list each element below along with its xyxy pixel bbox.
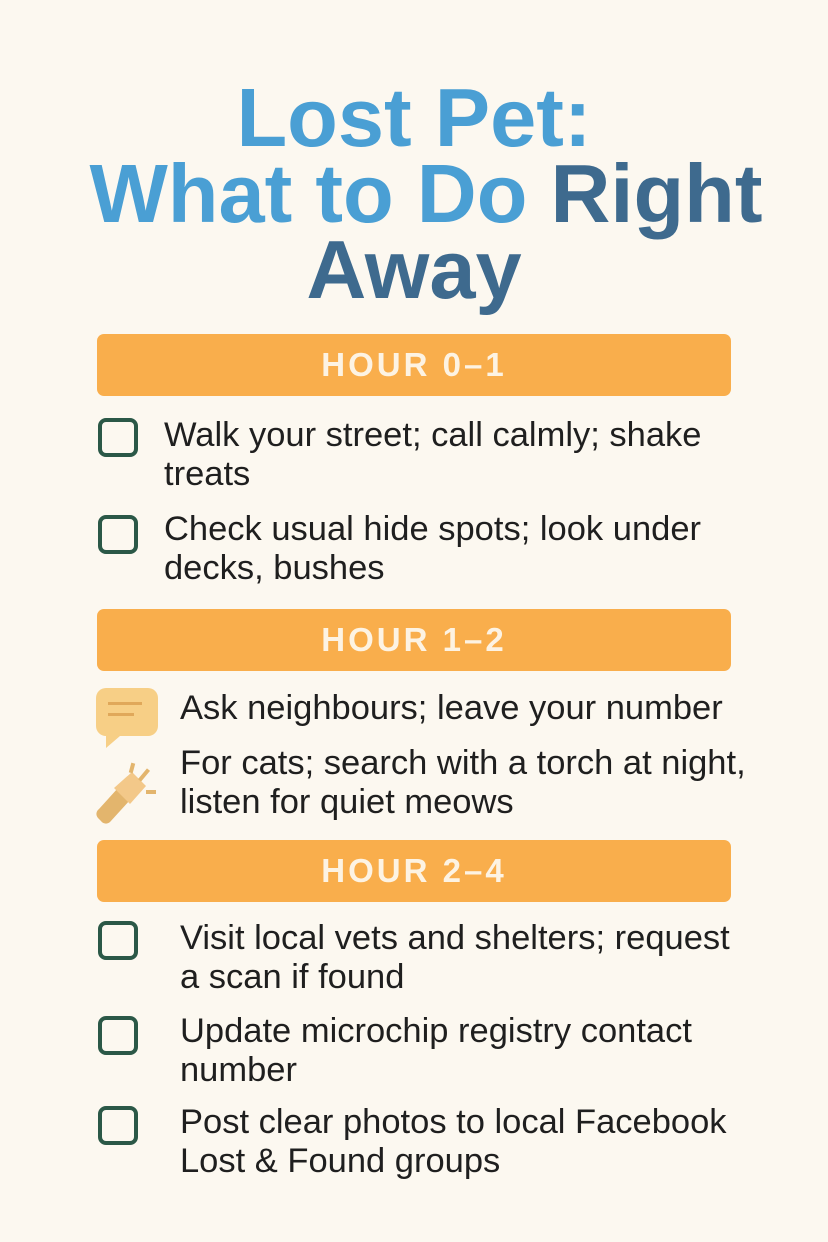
checkbox item 3	[98, 919, 730, 996]
checkbox item 1: treats	[164, 455, 250, 493]
title: Lost Pet:	[236, 71, 592, 164]
checkbox item 4	[98, 1012, 692, 1089]
checkbox item 1: Walk your street; call calmly; shake	[164, 416, 701, 454]
banner: hour 0-1	[97, 334, 731, 396]
banner: hour 1-2: HOUR 1–2	[321, 621, 507, 658]
banner: hour 1-2	[97, 609, 731, 671]
title: What to Do Right	[89, 147, 763, 240]
checkbox item 2: Check usual hide spots; look under	[164, 510, 701, 548]
banner: hour 0-1: HOUR 0–1	[321, 346, 507, 383]
banner: hour 2-4: HOUR 2–4	[321, 852, 507, 889]
checkbox item 3: a scan if found	[180, 958, 404, 996]
item: cats torch	[96, 744, 746, 824]
item: ask neighbours	[96, 688, 723, 748]
item: cats torch: For cats; search with a torch at night,	[180, 744, 746, 782]
item: cats torch: listen for quiet meows	[180, 783, 514, 821]
icon: torch	[96, 762, 156, 824]
banner: hour 2-4	[97, 840, 731, 902]
title	[89, 71, 763, 316]
icon: speech bubble	[96, 688, 158, 748]
checkbox item 3: Visit local vets and shelters; request	[180, 919, 730, 957]
item: ask neighbours: Ask neighbours; leave your number	[180, 689, 723, 727]
checkbox item 4: number	[180, 1051, 297, 1089]
title: Away	[306, 223, 522, 316]
checkbox item 2	[98, 510, 701, 587]
checkbox item 5: Lost & Found groups	[180, 1142, 500, 1180]
checkbox item 2: decks, bushes	[164, 549, 385, 587]
checkbox item 1	[98, 416, 701, 493]
checkbox item 4: Update microchip registry contact	[180, 1012, 692, 1050]
checkbox item 5	[98, 1103, 727, 1180]
checkbox item 5: Post clear photos to local Facebook	[180, 1103, 727, 1141]
